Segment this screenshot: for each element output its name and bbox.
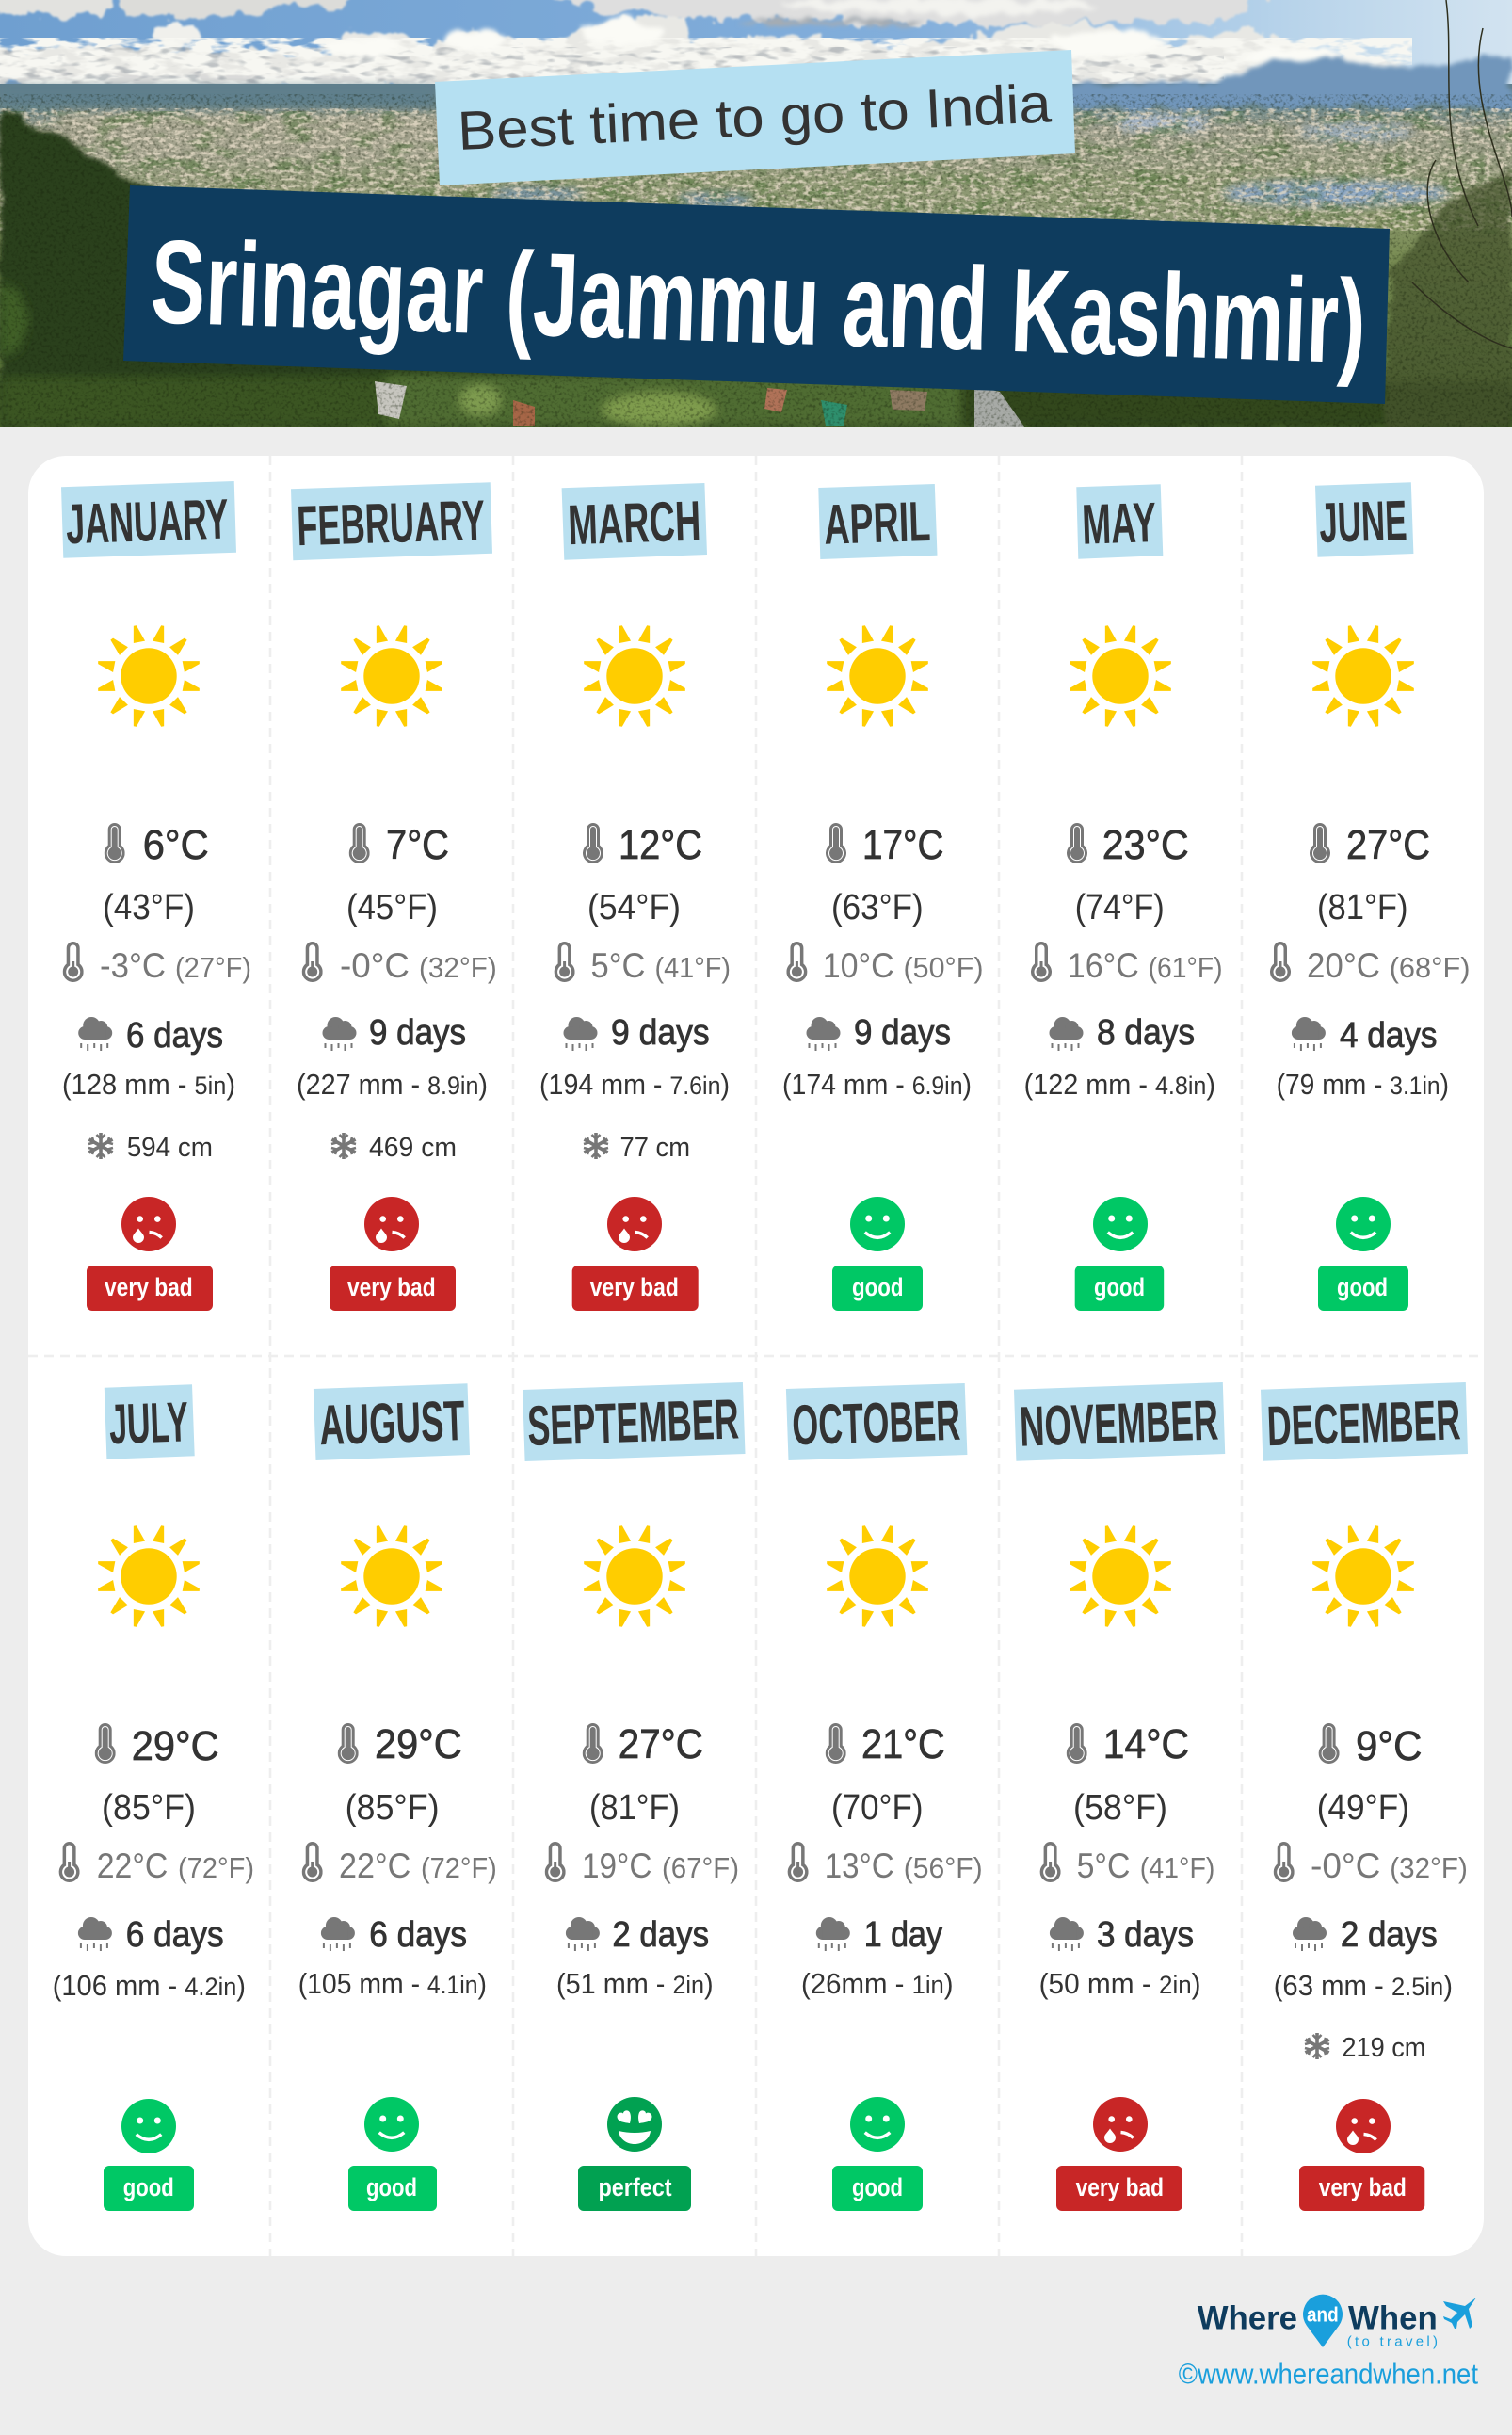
rainy days: 4 days xyxy=(1340,1016,1437,1056)
mountains xyxy=(1054,56,1512,107)
rating: very bad: very bad xyxy=(347,1273,436,1301)
low temperature xyxy=(1077,1846,1214,1885)
month label: April: APRIL xyxy=(823,490,931,556)
low temperature xyxy=(340,946,497,985)
icon: thermometer high xyxy=(95,1723,116,1764)
month label: February xyxy=(291,482,492,560)
rainy days: 2 days xyxy=(612,1915,709,1955)
low temperature: (61°F) xyxy=(1149,951,1223,984)
high temperature Fahrenheit: (85°F) xyxy=(346,1788,440,1828)
low temperature xyxy=(591,946,731,985)
panel: March xyxy=(539,483,731,1311)
month label: January: JANUARY xyxy=(65,487,230,556)
icon: rain xyxy=(816,1917,850,1951)
high temperature: 29°C xyxy=(132,1723,219,1769)
rating: perfect: perfect xyxy=(599,2173,672,2201)
rainy days: 9 days xyxy=(854,1013,951,1053)
month label: August: AUGUST xyxy=(318,1389,466,1457)
rating: good xyxy=(832,2166,923,2211)
icon: thermometer high xyxy=(349,823,370,863)
month label: August xyxy=(314,1383,470,1460)
high temperature: 6°C xyxy=(143,822,209,868)
icon: crying face xyxy=(1093,2097,1148,2152)
rainy days: 8 days xyxy=(1097,1013,1195,1053)
high temperature: 29°C xyxy=(375,1721,462,1767)
rainfall: (128 mm - 5in) xyxy=(62,1068,235,1101)
icon: location pin: and xyxy=(1307,2303,1339,2327)
rating: good xyxy=(1075,1266,1164,1311)
high temperature Fahrenheit: (81°F) xyxy=(1317,888,1408,927)
resort grounds xyxy=(386,375,1512,427)
rating: good: good xyxy=(852,2173,903,2201)
rating: good xyxy=(104,2166,194,2211)
low temperature: (67°F) xyxy=(662,1851,739,1884)
month label: September xyxy=(523,1382,746,1461)
panel: June xyxy=(1270,482,1471,1311)
icon: thermometer low xyxy=(302,1842,323,1882)
month label: February: FEBRUARY xyxy=(296,489,486,557)
high temperature: 23°C xyxy=(1102,822,1189,868)
low temperature xyxy=(823,946,983,985)
low temperature: 20°C xyxy=(1307,946,1380,985)
low temperature: (32°F) xyxy=(419,951,497,984)
icon: snow xyxy=(331,1133,356,1159)
icon: smiling face xyxy=(1336,1197,1391,1251)
rainfall: (26mm - 1in) xyxy=(801,1967,954,2000)
icon: rain xyxy=(1292,1017,1326,1051)
icon: snow xyxy=(1305,2033,1329,2059)
low temperature xyxy=(97,1846,254,1885)
rating: very bad: very bad xyxy=(1319,2173,1407,2201)
icon: heart-eyes face xyxy=(607,2097,662,2152)
high temperature Fahrenheit: (63°F) xyxy=(831,888,924,927)
high temperature: 27°C xyxy=(1346,822,1430,868)
rainfall: (227 mm - 8.9in) xyxy=(297,1068,488,1101)
icon: rain xyxy=(806,1017,840,1051)
icon: rain xyxy=(1049,1017,1083,1051)
month label: June: JUNE xyxy=(1318,489,1407,555)
rainy days: 1 day xyxy=(864,1915,942,1955)
icon: snow xyxy=(584,1133,608,1159)
rainfall: (106 mm - 4.2in) xyxy=(53,1969,246,2002)
icon: thermometer low xyxy=(1270,942,1291,982)
icon: smiling face xyxy=(1093,1197,1148,1251)
icon: thermometer low xyxy=(1274,1842,1295,1882)
main white panel xyxy=(28,456,1484,2256)
month label: September: SEPTEMBER xyxy=(526,1387,740,1458)
subtitle banner: Best time to go to India xyxy=(457,73,1054,162)
icon: thermometer high xyxy=(105,823,125,863)
rainfall: (51 mm - 2in) xyxy=(556,1967,714,2000)
icon: airplane xyxy=(1443,2298,1476,2329)
icon: smiling face xyxy=(121,2099,176,2153)
icon: sun xyxy=(1312,1525,1414,1627)
month label: October: OCTOBER xyxy=(791,1389,961,1457)
rainfall: (122 mm - 4.8in) xyxy=(1024,1068,1215,1101)
low temperature xyxy=(1311,1846,1468,1885)
high temperature Fahrenheit: (45°F) xyxy=(346,888,438,927)
rainy days: 6 days xyxy=(126,1016,223,1056)
icon: smiling face xyxy=(364,2097,419,2152)
icon: sun xyxy=(827,625,928,727)
icon: thermometer high xyxy=(826,823,846,863)
snowfall: 219 cm xyxy=(1342,2033,1425,2063)
icon: thermometer low xyxy=(63,942,84,982)
low temperature: 16°C xyxy=(1068,946,1139,985)
icon: thermometer low xyxy=(555,942,575,982)
icon: rain xyxy=(566,1917,600,1951)
panel: July xyxy=(53,1384,254,2211)
snowfall: 469 cm xyxy=(369,1133,457,1163)
low temperature xyxy=(100,946,251,985)
rating: good: good xyxy=(852,1273,904,1301)
icon: thermometer high xyxy=(1067,1723,1087,1764)
low temperature: 5°C xyxy=(591,946,646,985)
month label: March xyxy=(562,483,707,560)
low temperature: -0°C xyxy=(340,946,410,985)
icon: thermometer high xyxy=(338,1723,359,1764)
month label: November xyxy=(1014,1382,1225,1461)
panel: January xyxy=(61,481,251,1311)
month label: April xyxy=(818,484,938,559)
rainy days: 6 days xyxy=(126,1915,224,1955)
icon: rain xyxy=(1050,1917,1084,1951)
rating: good: good xyxy=(1337,1273,1388,1301)
icon: thermometer low xyxy=(786,942,807,982)
icon: sun xyxy=(1070,1525,1171,1627)
rating: very bad xyxy=(1056,2166,1182,2211)
rainy days: 2 days xyxy=(1341,1915,1438,1955)
rating: good: good xyxy=(123,2173,174,2201)
low temperature xyxy=(825,1846,983,1885)
icon: thermometer low xyxy=(1031,942,1052,982)
low temperature: 19°C xyxy=(582,1846,651,1885)
icon: thermometer high xyxy=(583,823,603,863)
icon: location pin xyxy=(1303,2295,1343,2347)
icon: thermometer low xyxy=(302,942,323,982)
low temperature: (68°F) xyxy=(1390,951,1471,984)
low temperature: -0°C xyxy=(1311,1846,1380,1885)
high temperature: 14°C xyxy=(1103,1721,1189,1767)
low temperature: 22°C xyxy=(97,1846,168,1885)
icon: rain xyxy=(322,1017,356,1051)
icon: sun xyxy=(827,1525,928,1627)
icon: thermometer high xyxy=(826,1723,846,1764)
icon: sun xyxy=(1312,625,1414,727)
rating: very bad xyxy=(572,1266,699,1311)
low temperature xyxy=(582,1846,739,1885)
rating: very bad xyxy=(330,1266,456,1311)
rainfall: (194 mm - 7.6in) xyxy=(539,1068,730,1101)
high temperature Fahrenheit: (43°F) xyxy=(103,888,195,927)
rating: good xyxy=(1318,1266,1408,1311)
low temperature xyxy=(339,1846,497,1885)
icon: rain xyxy=(78,1017,112,1051)
website credit: ©www.whereandwhen.net xyxy=(1179,2358,1478,2391)
low temperature: 13°C xyxy=(825,1846,894,1885)
high temperature: 9°C xyxy=(1356,1723,1422,1769)
icon: sun xyxy=(584,1525,685,1627)
icon: sun xyxy=(98,625,200,727)
rainy days: 3 days xyxy=(1097,1915,1194,1955)
icon: thermometer high xyxy=(1319,1723,1340,1764)
tree at right edge xyxy=(1384,169,1512,427)
low temperature: (50°F) xyxy=(904,951,983,984)
rainfall: (174 mm - 6.9in) xyxy=(782,1068,972,1101)
panel: April xyxy=(782,484,983,1311)
high temperature: 7°C xyxy=(386,822,449,868)
low temperature: 22°C xyxy=(339,1846,410,1885)
high temperature Fahrenheit: (54°F) xyxy=(587,888,681,927)
month label: March: MARCH xyxy=(567,489,701,556)
panel: December xyxy=(1261,1382,1468,2211)
header photo: Srinagar valley xyxy=(0,0,1512,427)
forest left xyxy=(0,111,1512,427)
icon: thermometer high xyxy=(1067,823,1087,863)
month label: June xyxy=(1315,482,1413,557)
panel: October xyxy=(786,1383,983,2211)
icon: sun xyxy=(98,1525,200,1627)
low temperature xyxy=(1068,946,1223,985)
month label: October xyxy=(786,1383,967,1460)
icon: thermometer low xyxy=(59,1842,80,1882)
rating: very bad: very bad xyxy=(590,1273,679,1301)
icon: rain xyxy=(1293,1917,1327,1951)
high temperature: 17°C xyxy=(862,822,943,868)
icon: thermometer high xyxy=(1310,823,1330,863)
high temperature: 27°C xyxy=(619,1721,703,1767)
rating: very bad xyxy=(1299,2166,1424,2211)
panel: May xyxy=(1024,484,1223,1311)
month label: November: NOVEMBER xyxy=(1019,1388,1219,1459)
low temperature: (32°F) xyxy=(1390,1851,1468,1884)
low temperature xyxy=(1307,946,1471,985)
logo: Where and When xyxy=(1198,2295,1476,2350)
month label: July xyxy=(105,1384,195,1459)
panel: September xyxy=(523,1382,746,2211)
logo: Where and When: (to travel) xyxy=(1347,2334,1438,2350)
rating: very bad: very bad xyxy=(105,1273,193,1301)
icon: sun xyxy=(1070,625,1171,727)
subtitle banner xyxy=(435,50,1075,185)
rainfall: (50 mm - 2in) xyxy=(1039,1967,1201,2000)
icon: crying face xyxy=(121,1197,176,1251)
icon: rain xyxy=(563,1017,597,1051)
high temperature Fahrenheit: (85°F) xyxy=(102,1788,196,1828)
low temperature: (72°F) xyxy=(421,1851,497,1884)
high temperature Fahrenheit: (49°F) xyxy=(1317,1788,1409,1828)
panel: February xyxy=(291,482,497,1311)
month label: May xyxy=(1076,484,1163,559)
low temperature: (41°F) xyxy=(1140,1851,1214,1884)
icon: sun xyxy=(341,625,442,727)
month label: January xyxy=(61,481,236,558)
icon: crying face xyxy=(607,1197,662,1251)
rating: perfect xyxy=(578,2166,691,2211)
snowfall: 77 cm xyxy=(619,1133,690,1163)
icon: thermometer low xyxy=(1040,1842,1061,1882)
month label: May: MAY xyxy=(1081,491,1157,556)
panel: August xyxy=(298,1383,497,2211)
rating: good: good xyxy=(1094,1273,1145,1301)
icon: sun xyxy=(341,1525,442,1627)
rating: very bad: very bad xyxy=(1076,2173,1164,2201)
rainfall: (63 mm - 2.5in) xyxy=(1274,1969,1453,2002)
high temperature Fahrenheit: (81°F) xyxy=(589,1788,680,1828)
panel: November xyxy=(1014,1382,1225,2211)
icon: crying face xyxy=(364,1197,419,1251)
high temperature: 12°C xyxy=(619,822,702,868)
rainy days: 6 days xyxy=(369,1915,467,1955)
rating: very bad xyxy=(87,1266,213,1311)
high temperature: 21°C xyxy=(861,1721,945,1767)
high temperature Fahrenheit: (74°F) xyxy=(1075,888,1165,927)
low temperature: 5°C xyxy=(1077,1846,1130,1885)
icon: thermometer low xyxy=(788,1842,809,1882)
icon: rain xyxy=(321,1917,355,1951)
icon: thermometer high xyxy=(583,1723,603,1764)
icon: rain xyxy=(78,1917,112,1951)
low temperature: 10°C xyxy=(823,946,894,985)
rainfall: (105 mm - 4.1in) xyxy=(298,1967,487,2000)
rainy days: 9 days xyxy=(611,1013,710,1053)
high temperature Fahrenheit: (58°F) xyxy=(1073,1788,1167,1828)
rainy days: 9 days xyxy=(369,1013,466,1053)
icon: smiling face xyxy=(850,2097,905,2152)
rainfall: (79 mm - 3.1in) xyxy=(1277,1068,1449,1101)
month label: July: JULY xyxy=(108,1390,189,1456)
low temperature: (27°F) xyxy=(175,951,251,984)
logo: Where and When: When xyxy=(1348,2299,1438,2336)
icon: thermometer low xyxy=(545,1842,566,1882)
rating: good xyxy=(348,2166,437,2211)
low temperature: (41°F) xyxy=(655,951,731,984)
snowfall: 594 cm xyxy=(127,1133,213,1163)
low temperature: (56°F) xyxy=(904,1851,983,1884)
high temperature Fahrenheit: (70°F) xyxy=(831,1788,923,1828)
rating: good xyxy=(832,1266,923,1311)
icon: smiling face xyxy=(850,1197,905,1251)
logo: Where and When: Where xyxy=(1198,2299,1297,2336)
icon: snow xyxy=(88,1133,113,1159)
icon: crying face xyxy=(1336,2099,1391,2153)
low temperature: -3°C xyxy=(100,946,166,985)
icon: sun xyxy=(584,625,685,727)
rating: good: good xyxy=(366,2173,417,2201)
low temperature: (72°F) xyxy=(178,1851,254,1884)
